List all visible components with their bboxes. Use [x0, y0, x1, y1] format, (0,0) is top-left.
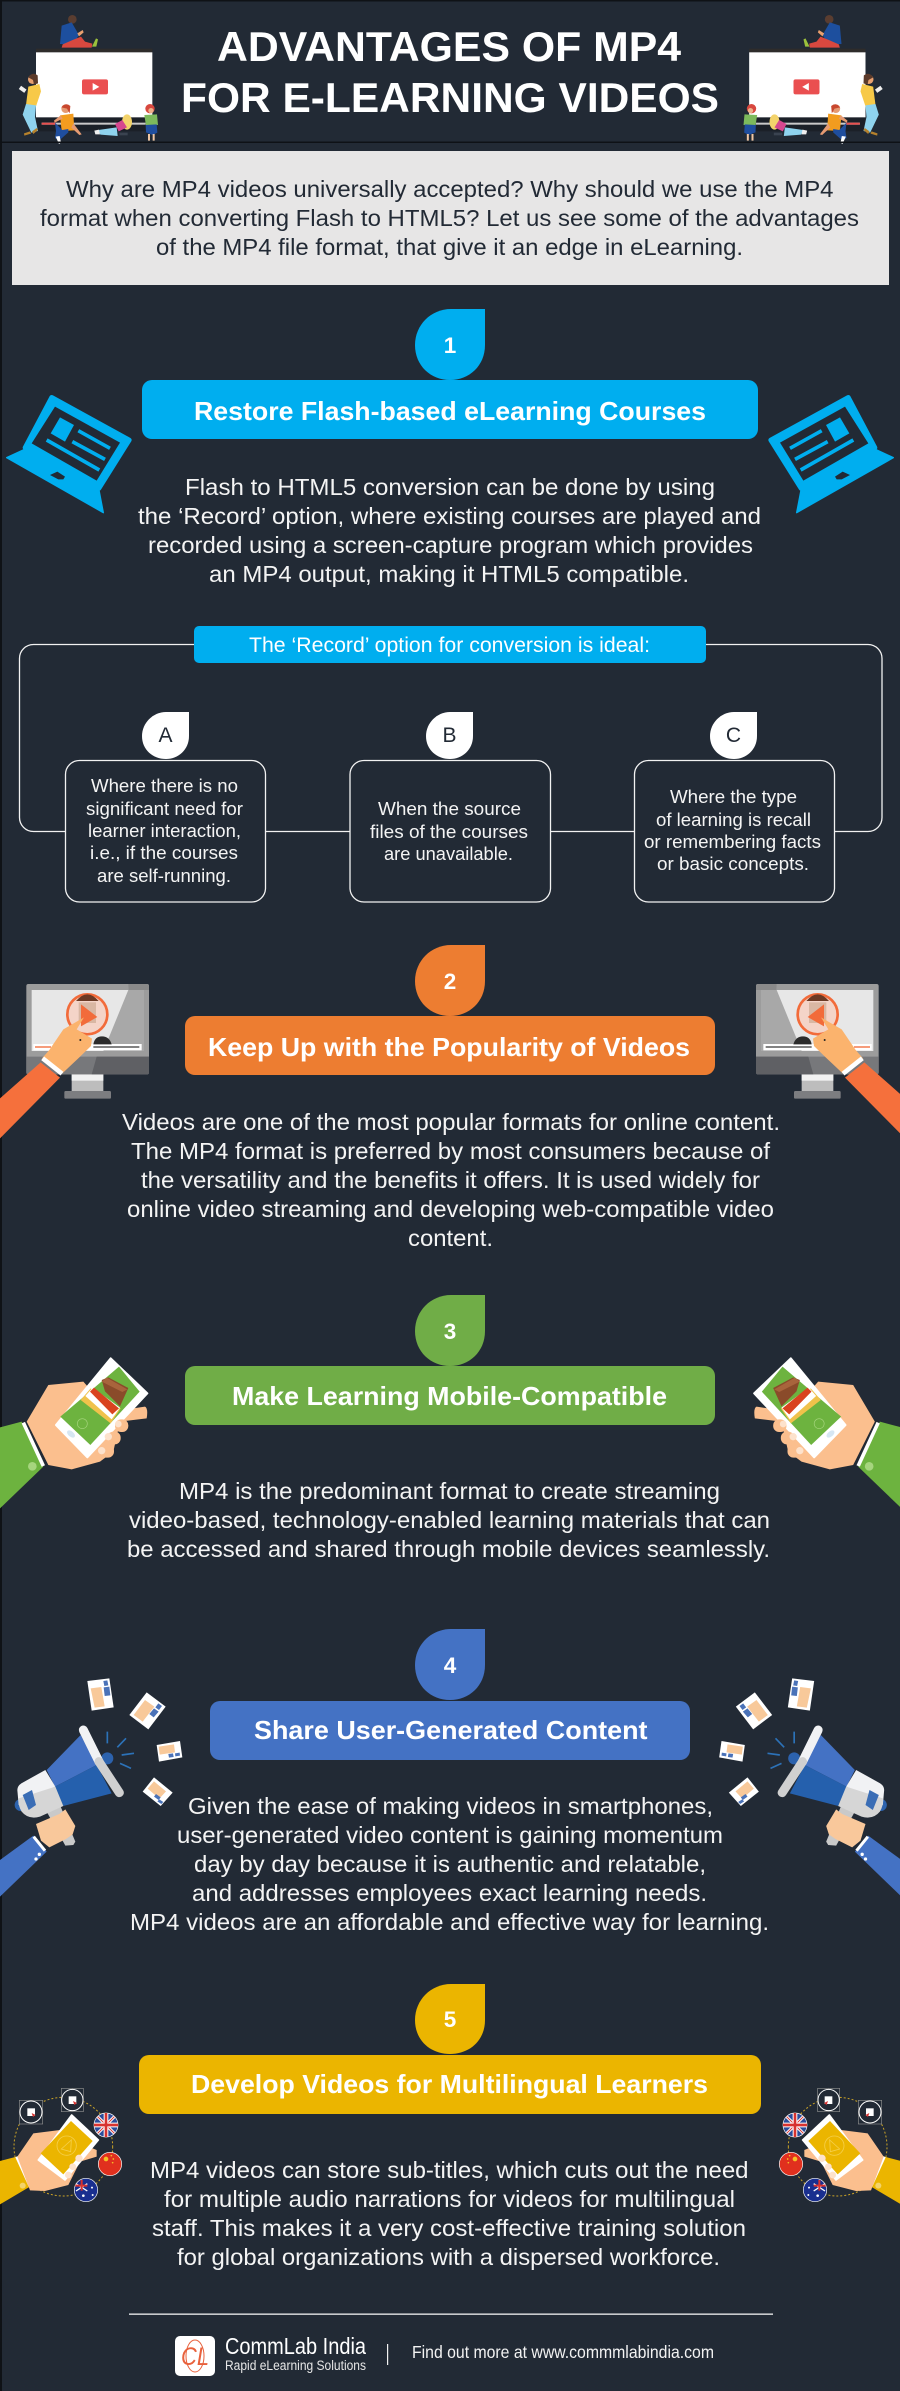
number badge 5 — [415, 1984, 485, 2054]
body text 4: day by day because it is authentic and relatable, — [194, 1851, 706, 1877]
icon: phone with flags right — [779, 2088, 900, 2204]
flag: Australia — [74, 2178, 98, 2202]
title: FOR E-LEARNING VIDEOS — [181, 74, 719, 121]
body text 3: MP4 is the predominant format to create streaming — [179, 1478, 720, 1504]
option C — [634, 712, 834, 902]
body text 1: recorded using a screen-capture program which provides — [148, 532, 753, 558]
number badge 3 — [415, 1295, 485, 1366]
number badge 1 — [415, 309, 485, 380]
option C: or remembering facts — [644, 831, 821, 852]
body text 3: video-based, technology-enabled learning materials that can — [129, 1507, 770, 1533]
body text 2: Videos are one of the most popular formats for online content. — [122, 1109, 780, 1135]
flag: UK — [94, 2113, 118, 2137]
body text 1 — [138, 474, 761, 587]
flag: China — [98, 2152, 122, 2176]
illustration: people around video screen, right — [744, 15, 883, 144]
body text 2: The MP4 format is preferred by most consumers because of — [131, 1138, 770, 1164]
body text 5: for global organizations with a dispersed workforce. — [177, 2244, 720, 2270]
captions icons — [19, 2088, 83, 2124]
footer — [129, 2314, 773, 2376]
heading bar 2: Keep Up with the Popularity of Videos — [208, 1032, 690, 1062]
icon: hand holding phone left — [0, 1358, 147, 1508]
number badge 2: 2 — [444, 969, 456, 994]
icon: laptop left — [7, 397, 129, 513]
number badge 4: 4 — [444, 1653, 457, 1678]
body text 5 — [150, 2157, 748, 2270]
body text 4: MP4 videos are an affordable and effective way for learning. — [130, 1909, 769, 1935]
section 2: popularity of videos — [0, 945, 900, 1251]
heading bar 3: Make Learning Mobile-Compatible — [232, 1381, 667, 1411]
body text 3: be accessed and shared through mobile devices seamlessly. — [127, 1536, 770, 1562]
body text 1: Flash to HTML5 conversion can be done by using — [185, 474, 715, 500]
heading bar 3 — [185, 1366, 715, 1425]
intro panel — [12, 151, 889, 285]
heading bar 2 — [185, 1016, 715, 1075]
body text 1: the ‘Record’ option, where existing courses are played and — [138, 503, 761, 529]
number badge 5: 5 — [444, 2007, 456, 2032]
record option panel — [20, 626, 882, 902]
icon: megaphone with papers right — [719, 1678, 900, 1897]
logo: CommLab India: CL — [181, 2343, 209, 2371]
icon: hand touching monitor left — [0, 984, 149, 1138]
section 5: multilingual learners — [0, 1984, 900, 2270]
body text 2: content. — [408, 1225, 493, 1251]
section 4: user-generated content — [0, 1629, 900, 1935]
option A: Where there is no — [91, 775, 238, 796]
heading bar 5: Develop Videos for Multilingual Learners — [191, 2069, 708, 2099]
option B: B — [442, 724, 457, 747]
title: ADVANTAGES OF MP4 — [217, 23, 682, 70]
body text 4: and addresses employees exact learning needs. — [192, 1880, 707, 1906]
icon: hand holding phone right — [754, 1358, 900, 1508]
heading bar 5 — [139, 2055, 761, 2114]
option A: significant need for — [86, 798, 243, 819]
record option label: The ‘Record’ option for conversion is ideal: — [249, 634, 650, 657]
option A: i.e., if the courses — [90, 842, 238, 863]
body text 2 — [122, 1109, 780, 1251]
section 3: mobile-compatible — [0, 1295, 900, 1562]
number badge 4 — [415, 1629, 485, 1700]
icon: phone with flags left — [0, 2088, 122, 2204]
icon: megaphone with papers left — [0, 1678, 182, 1897]
option C: or basic concepts. — [657, 853, 809, 874]
logo: CommLab India: Rapid eLearning Solutions — [225, 2358, 366, 2373]
option B: are unavailable. — [384, 843, 513, 864]
option A: are self-running. — [97, 865, 231, 886]
body text 5: staff. This makes it a very cost-effective training solution — [152, 2215, 746, 2241]
intro text: format when converting Flash to HTML5? Let us see some of the advantages — [40, 205, 859, 231]
heading bar 4: Share User-Generated Content — [254, 1715, 648, 1745]
papers — [87, 1678, 182, 1806]
website link text: Find out more at www.commmlabindia.com — [412, 2342, 714, 2362]
illustration: people around video screen, left — [19, 15, 158, 144]
option A: learner interaction, — [88, 820, 241, 841]
intro text: Why are MP4 videos universally accepted? Why should we use the MP4 — [66, 176, 833, 202]
option B — [350, 712, 550, 902]
body text 4: Given the ease of making videos in smartphones, — [188, 1793, 713, 1819]
heading bar 4 — [210, 1701, 690, 1760]
logo: CommLab India: CommLab India — [225, 2333, 366, 2359]
option A — [66, 712, 266, 902]
section 1: restore flash-based courses — [7, 309, 893, 902]
body text 2: the versatility and the benefits it offers. It is used widely for — [141, 1167, 760, 1193]
title — [181, 23, 719, 121]
option A: A — [158, 724, 173, 747]
body text 5: for multiple audio narrations for videos for multilingual — [164, 2186, 735, 2212]
body text 4: user-generated video content is gaining momentum — [177, 1822, 723, 1848]
option B: files of the courses — [370, 821, 528, 842]
body text 4 — [130, 1793, 769, 1935]
record option label — [194, 626, 706, 663]
icon: laptop right — [771, 397, 893, 513]
body text 2: online video streaming and developing web-compatible video — [127, 1196, 774, 1222]
logo: CommLab India — [175, 2333, 366, 2376]
body text 1: an MP4 output, making it HTML5 compatible. — [209, 561, 689, 587]
heading bar 1 — [142, 380, 758, 439]
body text 5: MP4 videos can store sub-titles, which cuts out the need — [150, 2157, 748, 2183]
number badge 2 — [415, 945, 485, 1016]
option C: C — [726, 724, 741, 747]
option C: of learning is recall — [656, 809, 811, 830]
option B: When the source — [378, 798, 521, 819]
intro text: of the MP4 file format, that give it an edge in eLearning. — [156, 234, 743, 260]
option C: Where the type — [670, 786, 797, 807]
intro text — [40, 176, 859, 260]
header panel — [0, 15, 900, 144]
number badge 1: 1 — [444, 333, 456, 358]
number badge 3: 3 — [444, 1319, 456, 1344]
body text 3 — [127, 1478, 770, 1562]
icon: hand touching monitor right — [756, 984, 900, 1138]
heading bar 1: Restore Flash-based eLearning Courses — [194, 396, 706, 426]
